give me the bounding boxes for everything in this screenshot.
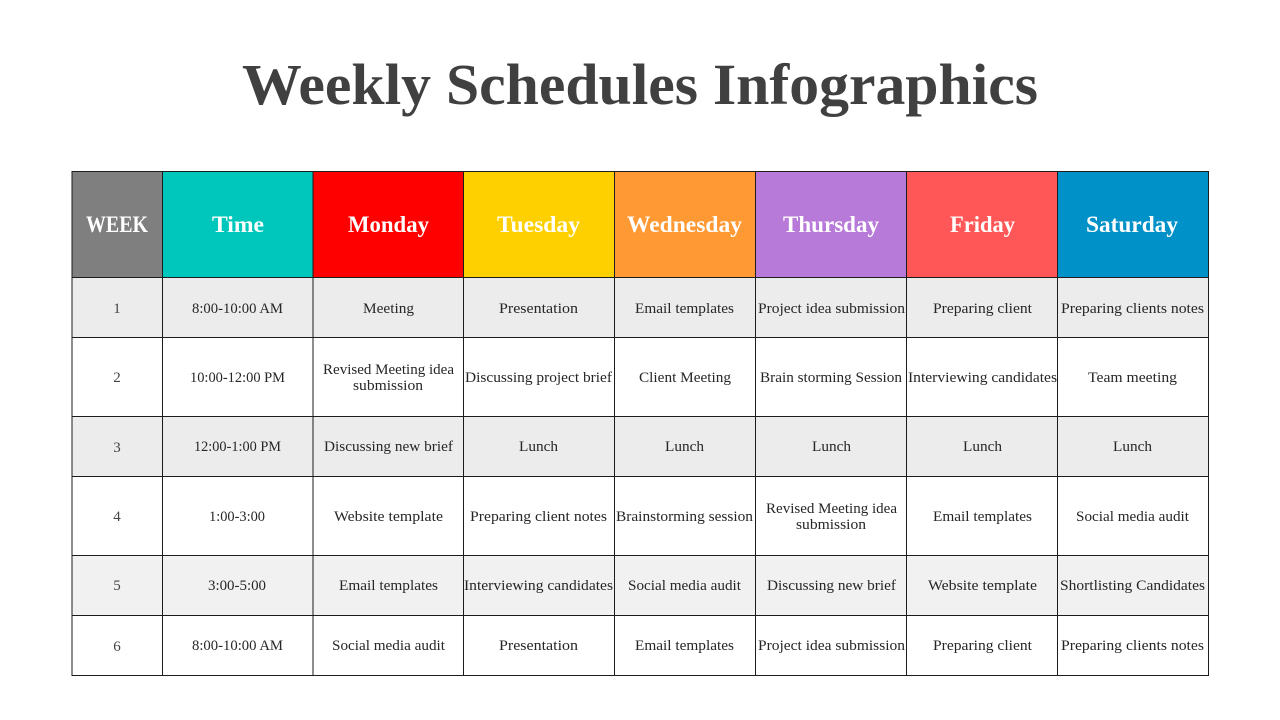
row 6: Email templates bbox=[635, 638, 734, 654]
header cell: Saturday: Saturday bbox=[1086, 212, 1178, 237]
row 6: Project idea submission bbox=[758, 638, 906, 654]
row 5 bbox=[72, 555, 1208, 615]
row 1: 1 bbox=[113, 301, 121, 317]
row 4: Preparing client notes bbox=[470, 509, 607, 525]
row 5: 5 bbox=[113, 578, 121, 594]
header cell: Wednesday bbox=[614, 171, 756, 277]
header cell: Time: Time bbox=[212, 212, 264, 237]
row 6: Social media audit bbox=[332, 638, 445, 654]
row 2: Brain storming Session bbox=[760, 370, 903, 386]
header cell: WEEK bbox=[72, 171, 162, 277]
row 5: Social media audit bbox=[628, 578, 741, 594]
header cell: Friday: Friday bbox=[950, 212, 1015, 237]
row 3: 12:00-1:00 PM bbox=[194, 439, 281, 455]
row 5: Interviewing candidates bbox=[464, 578, 613, 594]
row 2: Revised Meeting idea bbox=[323, 362, 455, 378]
row 4: 1:00-3:00 bbox=[209, 509, 265, 525]
header cell: Saturday bbox=[1057, 171, 1208, 277]
row 3 bbox=[72, 416, 1208, 476]
row 4: submission bbox=[796, 517, 867, 533]
header row bbox=[72, 171, 1208, 277]
row 6: 6 bbox=[113, 639, 121, 655]
row 1: Email templates bbox=[635, 301, 734, 317]
row 5: Shortlisting Candidates bbox=[1060, 578, 1205, 594]
title: Weekly Schedules Infographics bbox=[242, 52, 1038, 117]
row 6: 8:00-10:00 AM bbox=[192, 638, 283, 654]
row 2: Discussing project brief bbox=[465, 370, 612, 386]
row 4 bbox=[72, 476, 1208, 555]
row 5: 3:00-5:00 bbox=[208, 578, 266, 594]
header cell: Thursday bbox=[756, 171, 907, 277]
row 1: Preparing client bbox=[933, 301, 1032, 317]
row 4: Social media audit bbox=[1076, 509, 1189, 525]
header cell: Tuesday: Tuesday bbox=[497, 212, 580, 237]
row 3: Lunch bbox=[963, 439, 1003, 455]
header cell: Friday bbox=[907, 171, 1057, 277]
header cell: Monday bbox=[313, 171, 464, 277]
row 6 bbox=[72, 615, 1208, 675]
row 5: Discussing new brief bbox=[767, 578, 896, 594]
row 5: Website template bbox=[928, 578, 1037, 594]
schedule table bbox=[72, 171, 1208, 676]
row 6: Presentation bbox=[499, 638, 579, 654]
row 6: Preparing client bbox=[933, 638, 1032, 654]
row 2: 2 bbox=[113, 370, 121, 386]
header cell: Thursday: Thursday bbox=[783, 212, 880, 237]
row 4: Revised Meeting idea bbox=[766, 501, 898, 517]
row 2: Client Meeting bbox=[639, 370, 731, 386]
row 1: Project idea submission bbox=[758, 301, 906, 317]
row 1: Presentation bbox=[499, 301, 579, 317]
row 2: submission bbox=[353, 378, 424, 394]
row 3: 3 bbox=[113, 440, 121, 456]
row 2: Team meeting bbox=[1088, 370, 1177, 386]
header cell: Monday: Monday bbox=[348, 212, 429, 237]
row 4: Email templates bbox=[933, 509, 1032, 525]
row 3: Lunch bbox=[812, 439, 852, 455]
row 2: 10:00-12:00 PM bbox=[190, 370, 285, 386]
row 4: Website template bbox=[334, 509, 443, 525]
header cell: WEEK: WEEK bbox=[86, 212, 148, 237]
header cell: Tuesday bbox=[464, 171, 614, 277]
row 3: Lunch bbox=[1113, 439, 1153, 455]
row 1 bbox=[72, 277, 1208, 337]
row 4: 4 bbox=[113, 509, 121, 525]
row 1: 8:00-10:00 AM bbox=[192, 301, 283, 317]
row 3: Lunch bbox=[519, 439, 559, 455]
row 4: Brainstorming session bbox=[616, 509, 754, 525]
header cell: Wednesday: Wednesday bbox=[627, 212, 742, 237]
row 1: Meeting bbox=[363, 301, 414, 317]
row 2 bbox=[72, 337, 1208, 416]
header cell: Time bbox=[162, 171, 313, 277]
row 2: Interviewing candidates bbox=[908, 370, 1057, 386]
row 1: Preparing clients notes bbox=[1061, 301, 1204, 317]
row 3: Discussing new brief bbox=[324, 439, 453, 455]
row 5: Email templates bbox=[339, 578, 438, 594]
row 6: Preparing clients notes bbox=[1061, 638, 1204, 654]
row 3: Lunch bbox=[665, 439, 705, 455]
